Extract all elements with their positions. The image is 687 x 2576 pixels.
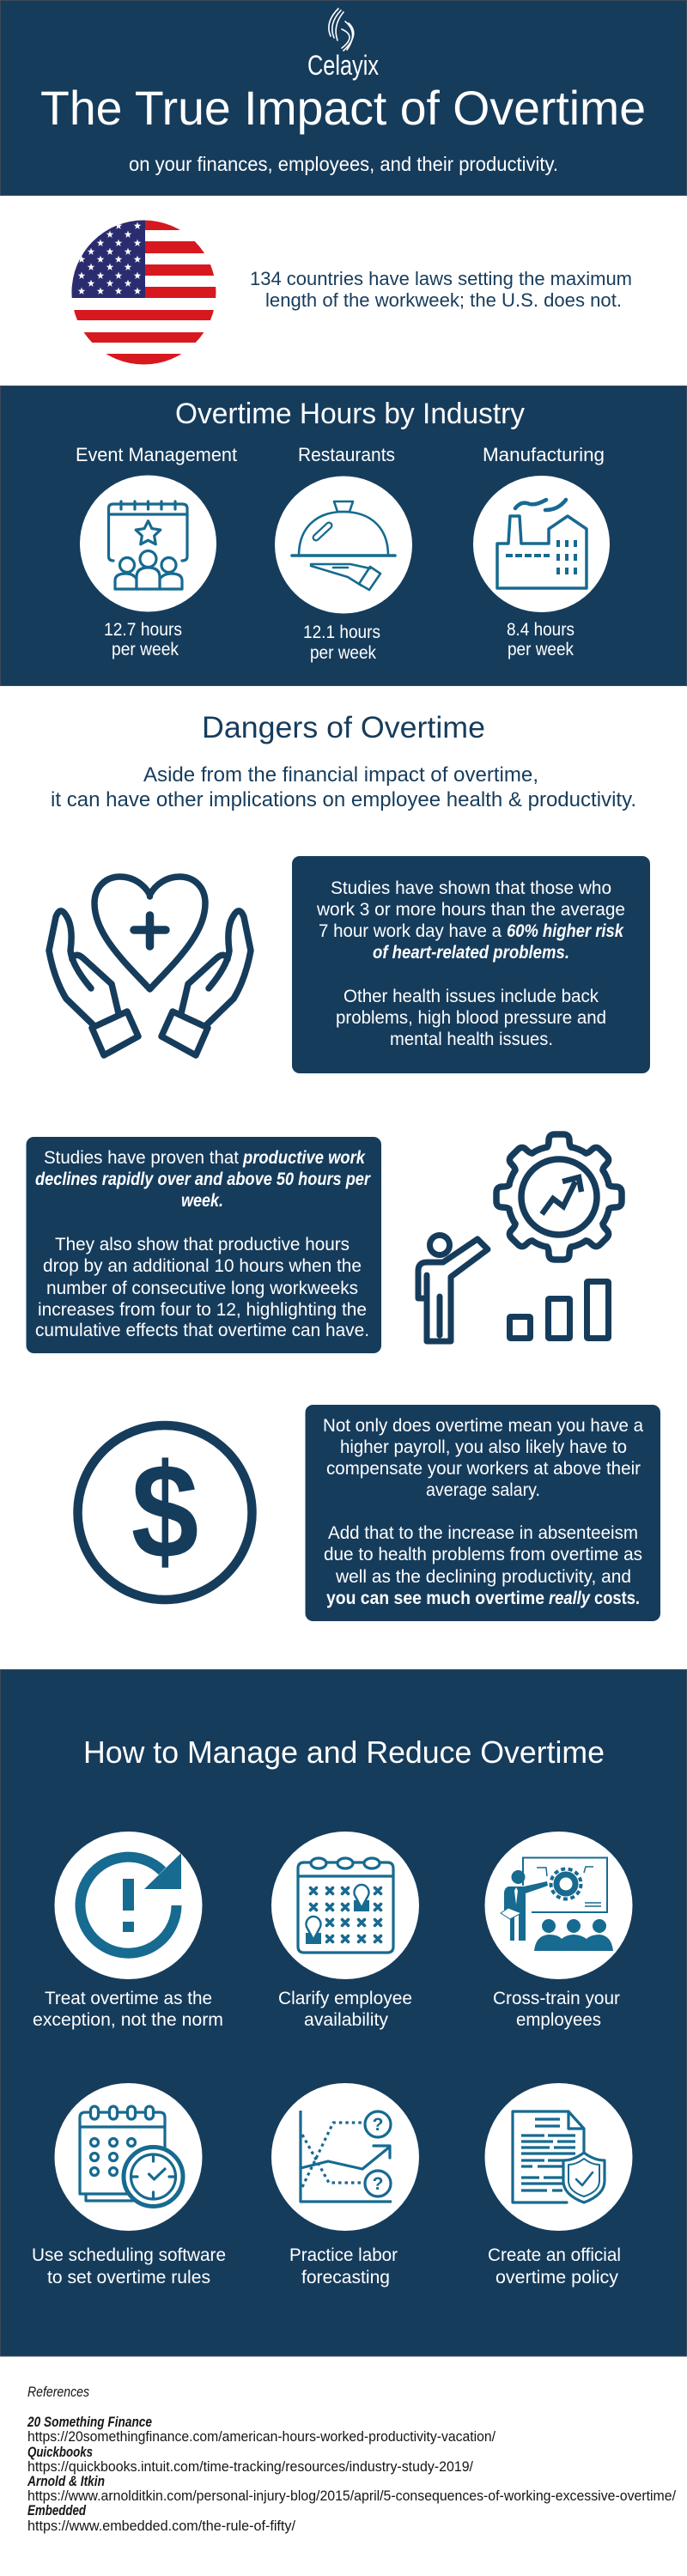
panel: header <box>0 0 687 196</box>
callout: heart risk: 7 hour work day have a <box>319 920 502 941</box>
icon: serving cloche <box>292 501 395 590</box>
callout: true cost: due to health problems from overtime as <box>324 1544 642 1564</box>
callout: true cost: compensate your workers at above their <box>326 1458 641 1479</box>
item: clarify availability <box>271 1832 419 2030</box>
callout: true cost: costs. <box>594 1588 640 1608</box>
item: event management <box>76 444 237 659</box>
intro text: it can have other implications on employee health & productivity. <box>51 788 636 811</box>
item: manufacturing: 8.4 hours <box>507 620 575 640</box>
icon: policy document with shield <box>513 2111 605 2202</box>
callout: productivity decline: week. <box>181 1190 223 1211</box>
heading: Overtime Hours by Industry <box>175 398 525 430</box>
item: restaurants: 12.1 hours <box>303 623 380 642</box>
icon: trainer at board with audience <box>501 1858 613 1951</box>
panel: dangers of overtime <box>26 711 660 1621</box>
panel: references: https://www.embedded.com/the-rule-of-fifty/ <box>27 2518 295 2534</box>
callout: productivity decline: productive work <box>242 1147 366 1168</box>
panel: references: https://20somethingfinance.com/american-hours-worked-productivity-vacation/ <box>27 2429 495 2445</box>
item: overtime policy: overtime policy <box>495 2267 618 2287</box>
question marks: ? <box>373 2174 383 2194</box>
callout: true cost: Not only does overtime mean you have a <box>323 1415 643 1436</box>
callout: true cost: Add that to the increase in absenteeism <box>328 1522 638 1543</box>
text: workweek law: 134 countries have laws setting the maximum <box>250 268 632 289</box>
item: cross-train: Cross-train your <box>493 1988 620 2008</box>
callout: productivity decline: They also show that productive hours <box>55 1234 350 1255</box>
callout: productivity decline: increases from four to 12, highlighting the <box>38 1299 367 1320</box>
item: clarify availability: availability <box>304 2009 388 2030</box>
callout: heart risk: Studies have shown that those who <box>331 878 611 898</box>
icon: event calendar with audience <box>108 501 187 589</box>
item: labor forecasting: forecasting <box>301 2267 390 2287</box>
text: workweek law: length of the workweek; the U.S. does not. <box>265 289 622 311</box>
text: workweek law <box>250 268 632 311</box>
callout: true cost: average salary. <box>426 1479 540 1500</box>
item: restaurants: per week <box>310 643 376 663</box>
panel: references: Arnold & Itkin <box>27 2474 105 2489</box>
panel: workweek law fact <box>69 215 632 369</box>
item: overtime policy <box>484 2083 632 2287</box>
icon: US flag <box>72 220 216 364</box>
item: treat overtime as the exception: exception, not the norm <box>33 2009 223 2030</box>
item: cross-train: employees <box>516 2009 601 2030</box>
icon: factory <box>497 500 587 588</box>
item: manufacturing: per week <box>508 640 574 659</box>
panel: references: Quickbooks <box>27 2445 93 2460</box>
title: The True Impact of Overtime <box>40 81 646 135</box>
item: cross-train <box>484 1832 632 2030</box>
callout: heart risk: Other health issues include back <box>344 986 599 1006</box>
callout: true cost: well as the declining productivity, and <box>335 1566 631 1587</box>
item: manufacturing <box>473 444 610 659</box>
icon: Celayix logo <box>329 9 354 51</box>
callout: productivity decline: cumulative effects that overtime can have. <box>35 1320 369 1340</box>
question marks <box>373 2115 383 2194</box>
question marks: ? <box>373 2115 383 2135</box>
heading: Dangers of Overtime <box>202 711 485 744</box>
icon: heart in hands <box>49 877 251 1055</box>
panel: references <box>27 2385 676 2534</box>
item: overtime policy: Create an official <box>488 2245 621 2265</box>
icon: dollar coin: $ <box>131 1436 198 1587</box>
intro text: Aside from the financial impact of overtime, <box>143 763 538 787</box>
item: manufacturing: Manufacturing <box>483 444 605 465</box>
panel: references: References <box>27 2385 89 2400</box>
callout: heart risk: 60% higher risk <box>507 920 624 941</box>
item: scheduling software: Use scheduling software <box>32 2245 226 2265</box>
panel: how to manage and reduce overtime <box>0 1669 687 2356</box>
item: restaurants: Restaurants <box>298 444 395 465</box>
icon: person, gear and growth bars <box>418 1134 622 1341</box>
callout: heart risk: of heart-related problems. <box>373 942 569 963</box>
callout: heart risk: work 3 or more hours than the average <box>316 899 625 920</box>
icon: forecast chart <box>301 2111 392 2202</box>
panel: references: https://quickbooks.intuit.com/time-tracking/resources/industry-study-2019/ <box>27 2459 473 2475</box>
item: scheduling software: to set overtime rules <box>47 2267 210 2287</box>
intro text <box>51 763 636 811</box>
icon: dollar coin <box>77 1425 252 1600</box>
item: labor forecasting <box>271 2083 419 2287</box>
panel: references: 20 Something Finance <box>27 2415 152 2430</box>
item: event management: 12.7 hours <box>104 620 182 640</box>
brand name: Celayix <box>307 50 379 81</box>
callout: true cost: higher payroll, you also likely have to <box>340 1437 627 1457</box>
callout: heart risk: problems, high blood pressure and <box>336 1007 606 1028</box>
icon: calendar with clock <box>80 2106 183 2207</box>
item: treat overtime as the exception <box>33 1832 223 2030</box>
callout: true cost <box>306 1405 660 1621</box>
panel: overtime hours by industry <box>0 386 687 685</box>
heading: How to Manage and Reduce Overtime <box>83 1735 605 1770</box>
item: event management: per week <box>112 640 179 659</box>
callout: heart risk: mental health issues. <box>390 1029 553 1049</box>
callout: productivity decline: Studies have proven that <box>44 1147 239 1168</box>
item: event management: Event Management <box>76 444 237 465</box>
callout: productivity decline <box>26 1137 381 1353</box>
panel: references: Embedded <box>27 2503 87 2518</box>
item: scheduling software <box>32 2083 226 2287</box>
subtitle: on your finances, employees, and their productivity. <box>129 153 558 175</box>
callout: true cost: really <box>549 1588 591 1608</box>
callout: heart risk <box>292 856 650 1073</box>
panel: references: https://www.arnolditkin.com/personal-injury-blog/2015/april/5-consequences-of-working-excessive-overtime/ <box>27 2488 676 2504</box>
icon: calendar with location pins <box>298 1858 393 1953</box>
callout: productivity decline: declines rapidly over and above 50 hours per <box>35 1169 371 1189</box>
callout: productivity decline: drop by an additional 10 hours when the <box>43 1255 362 1276</box>
item: clarify availability: Clarify employee <box>278 1988 412 2008</box>
item: treat overtime as the exception: Treat overtime as the <box>45 1988 212 2008</box>
callout: true cost: you can see much overtime <box>326 1588 544 1608</box>
item: labor forecasting: Practice labor <box>289 2245 398 2265</box>
icon: alert with circular arrow <box>81 1853 181 1953</box>
callout: productivity decline: number of consecutive long workweeks <box>46 1278 358 1298</box>
item: restaurants <box>275 444 412 663</box>
